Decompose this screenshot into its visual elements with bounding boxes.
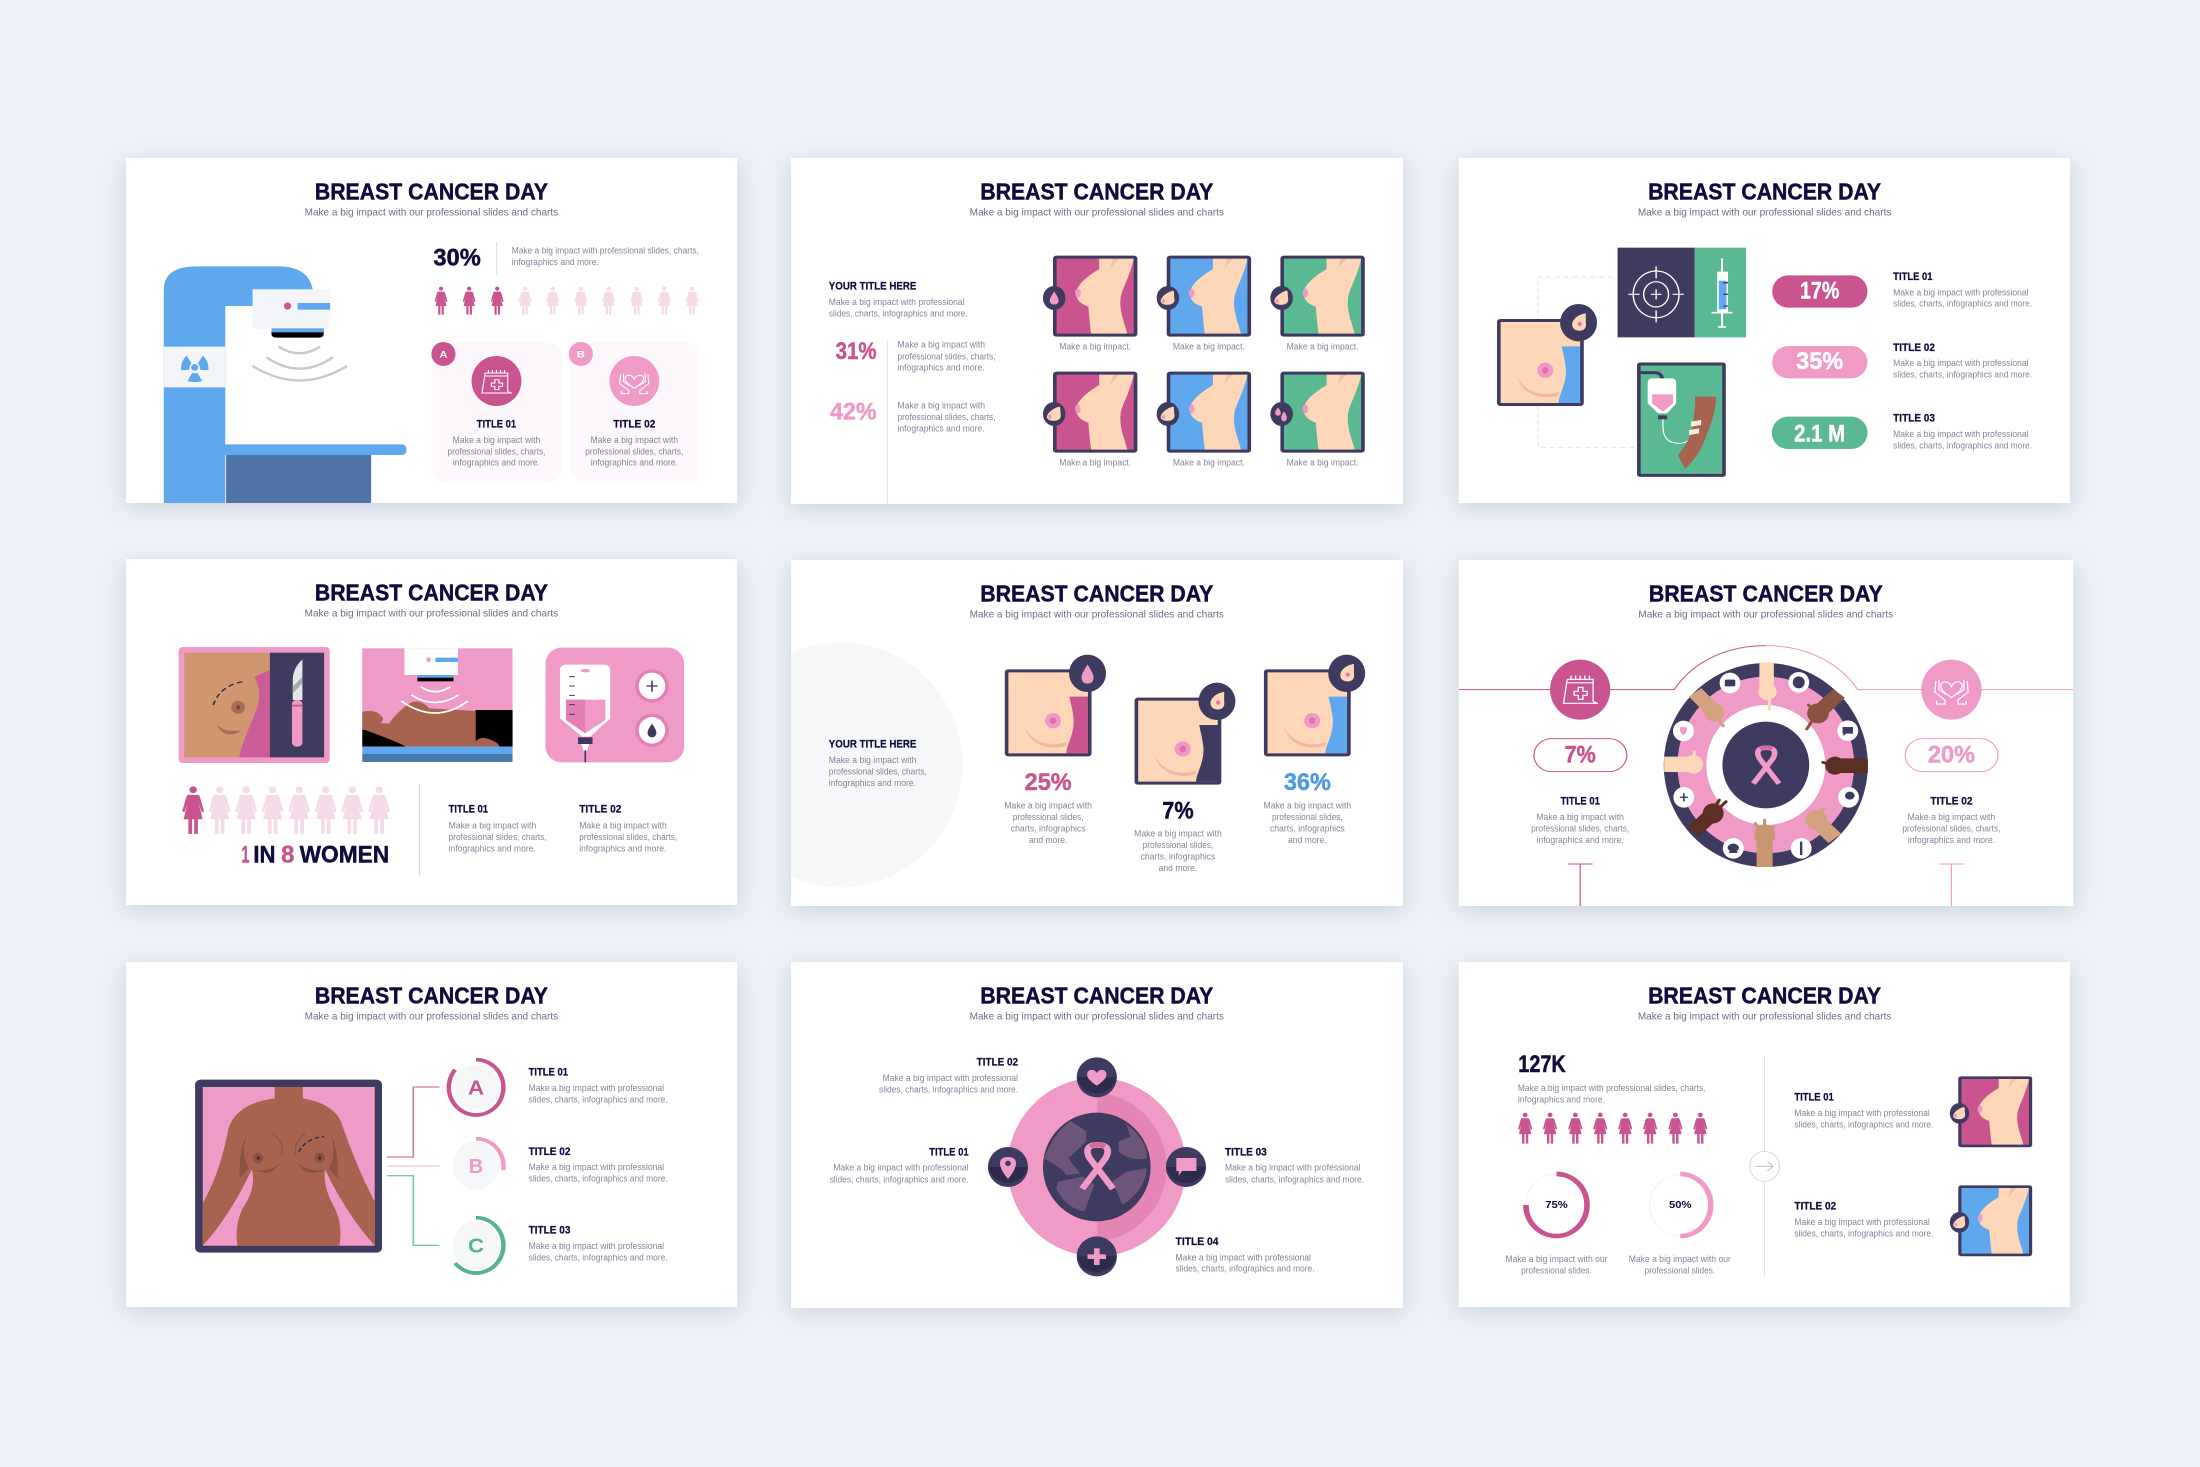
item: title 02 <box>1794 1186 2031 1255</box>
panel: slide 6 hands wheel <box>1459 560 2073 906</box>
card A: A <box>439 350 448 360</box>
slide 6 heading: BREAST CANCER DAY <box>1649 581 1883 607</box>
ring badge B: B <box>469 1154 483 1178</box>
right stat column: infographics and more. <box>1908 836 1995 846</box>
statistic: 1 in 8 women <box>241 841 389 868</box>
card A: infographics and more. <box>453 458 540 468</box>
donut: 50%: 50% <box>1669 1200 1692 1211</box>
text block: title 02: Make a big impact with <box>579 821 667 831</box>
illustration: IV bag and buttons <box>545 648 684 762</box>
text block: title 04: slides, charts, infographics and more. <box>1176 1264 1315 1274</box>
stat pills <box>1772 275 1867 449</box>
slide 7 heading <box>305 983 559 1022</box>
text block: title 01: infographics and more. <box>449 844 536 854</box>
left stat column: TITLE 01 <box>1560 795 1600 807</box>
text block: title 02: infographics and more. <box>579 844 666 854</box>
right stat column: professional slides, charts, <box>1902 824 2000 834</box>
text block: title 01: TITLE 01 <box>449 803 488 815</box>
card B <box>569 342 699 483</box>
right stat column: TITLE 02 <box>1930 795 1973 807</box>
stat column: 36%: 36% <box>1284 768 1331 795</box>
stat column: 25%: charts, infographics <box>1011 824 1086 834</box>
globe diagram <box>1008 1078 1186 1256</box>
text block: title 02: slides, charts, infographics and more. <box>879 1085 1018 1095</box>
card B: B <box>577 350 585 360</box>
text block: title 03: TITLE 03 <box>1225 1145 1267 1158</box>
stats column: infographics and more. <box>898 363 985 373</box>
your title block: YOUR TITLE HERE <box>829 738 916 750</box>
stat column: 7% <box>1134 683 1235 874</box>
slide 9 heading: Make a big impact with our professional slides and charts <box>1638 1012 1892 1022</box>
connector line <box>1459 646 2073 690</box>
donut: 75%: professional slides. <box>1521 1266 1592 1276</box>
text block: title 02 <box>579 803 677 854</box>
titled text list <box>529 1066 668 1263</box>
titled text list: TITLE 03 <box>1893 412 1935 424</box>
ring badge C <box>453 1218 503 1273</box>
slide 2 heading: Make a big impact with our professional slides and charts <box>970 208 1224 218</box>
ring badge B <box>453 1139 504 1189</box>
illustration: IV drip and arm <box>1639 364 1724 475</box>
titled text list <box>1893 270 2032 451</box>
stat column: 36%: and more. <box>1288 836 1327 846</box>
slide 8 heading <box>970 983 1224 1022</box>
donut: 75%: Make a big impact with our <box>1505 1255 1608 1265</box>
stat column: 25%: professional slides, <box>1013 813 1084 823</box>
panel: slide 4 one in eight women <box>126 559 737 905</box>
titled text list: slides, charts, infographics and more. <box>529 1253 668 1263</box>
slide 1 heading <box>305 179 559 218</box>
right stat column: 20% <box>1928 741 1975 768</box>
item: title 01 <box>1794 1078 2031 1146</box>
stat: 30%: Make a big impact with professional slides, charts, <box>512 246 699 256</box>
item: title 01: TITLE 01 <box>1794 1090 1834 1103</box>
your title block <box>829 279 968 319</box>
item: title 02: Make a big impact with professional <box>1794 1218 1930 1228</box>
your title block <box>829 738 927 789</box>
slide 2 heading <box>970 179 1224 218</box>
card B: TITLE 02 <box>613 417 656 430</box>
your title block: infographics and more. <box>829 779 916 789</box>
stats column: Make a big impact with <box>898 340 985 350</box>
text block: title 02: TITLE 02 <box>579 803 622 815</box>
hands wheel <box>1664 662 1868 867</box>
pictogram row: 1 of 8 women <box>182 786 390 834</box>
stat column: 36%: charts, infographics <box>1270 824 1345 834</box>
illustration: target and syringe <box>1618 248 1746 337</box>
slide 5 heading: Make a big impact with our professional slides and charts <box>970 610 1224 620</box>
stat: 127K: infographics and more. <box>1518 1095 1605 1105</box>
titled text list: slides, charts, infographics and more. <box>529 1095 668 1105</box>
ring badge A <box>449 1060 503 1115</box>
stat column: 25% <box>1004 655 1106 846</box>
left stat column: professional slides, charts, <box>1531 824 1629 834</box>
slide 3 heading: BREAST CANCER DAY <box>1648 179 1881 205</box>
slide 4 heading: BREAST CANCER DAY <box>315 580 548 606</box>
stat: 127K <box>1518 1050 1706 1105</box>
illustration: torso frame <box>195 1080 382 1253</box>
text block: title 03: Make a big impact with professional <box>1225 1163 1360 1173</box>
text block: title 02: professional slides, charts, <box>579 833 677 843</box>
card A: professional slides, charts, <box>447 447 545 457</box>
slide 6 heading <box>1638 581 1894 620</box>
left stat column <box>1531 660 1629 906</box>
ring badge C: C <box>468 1233 484 1257</box>
stat: 127K: 127K <box>1518 1050 1566 1077</box>
item: title 01: slides, charts, infographics and more. <box>1794 1120 1933 1130</box>
ring badge A: A <box>468 1075 484 1099</box>
slide 5 heading: BREAST CANCER DAY <box>980 581 1213 607</box>
stats column: 31% <box>836 337 877 364</box>
right stat column <box>1902 660 2000 906</box>
connectors <box>387 1087 439 1245</box>
titled text list: Make a big impact with professional <box>529 1163 664 1173</box>
left stat column: Make a big impact with <box>1536 813 1624 823</box>
donut: 75% <box>1505 1174 1608 1276</box>
stat column: 7%: professional slides, <box>1143 841 1213 851</box>
tile row 2: Make a big impact. <box>1059 458 1131 468</box>
slide 4 heading: Make a big impact with our professional slides and charts <box>305 609 559 619</box>
left stat column: 7% <box>1565 741 1596 768</box>
titled text list: Make a big impact with professional <box>1893 288 2029 298</box>
illustration: radiation therapy <box>362 648 513 762</box>
stat column: 7%: 7% <box>1162 797 1194 824</box>
titled text list: Make a big impact with professional <box>1893 359 2029 369</box>
text block: title 01: Make a big impact with <box>449 821 536 831</box>
tile row 1: Make a big impact. <box>1173 342 1245 352</box>
panel: slide 8 globe with four nodes <box>791 962 1403 1308</box>
stats column: professional slides, charts, <box>898 413 996 423</box>
titled text list: TITLE 03 <box>529 1224 571 1236</box>
slide 7 heading: BREAST CANCER DAY <box>315 983 548 1009</box>
slide 6 heading: Make a big impact with our professional slides and charts <box>1638 610 1894 620</box>
titled text list: slides, charts, infographics and more. <box>529 1174 668 1184</box>
titled text list: slides, charts, infographics and more. <box>1893 441 2032 451</box>
text block: title 01 <box>449 803 547 854</box>
text block: title 01: TITLE 01 <box>929 1145 969 1158</box>
stats column: professional slides, charts, <box>898 352 996 362</box>
text block: title 02 <box>879 1056 1018 1095</box>
titled text list: Make a big impact with professional <box>529 1084 664 1094</box>
text block: title 02: Make a big impact with professional <box>883 1074 1018 1084</box>
titled text list: TITLE 01 <box>529 1066 568 1078</box>
slide 8 heading: Make a big impact with our professional slides and charts <box>970 1012 1224 1022</box>
text block: title 01: professional slides, charts, <box>449 833 547 843</box>
tile row 2 <box>1043 373 1363 468</box>
illustration: mammography machine <box>164 266 406 503</box>
titled text list: TITLE 02 <box>529 1145 571 1158</box>
text block: title 01: slides, charts, infographics and more. <box>830 1175 969 1185</box>
stats column: 42% <box>830 398 877 425</box>
text block: title 04 <box>1176 1235 1315 1274</box>
slide 2 heading: BREAST CANCER DAY <box>980 179 1213 205</box>
stat column: 36% <box>1264 655 1365 846</box>
your title block: slides, charts, infographics and more. <box>829 309 968 319</box>
panel: slide 1 mammography machine <box>126 158 737 503</box>
tile row 2: Make a big impact. <box>1287 458 1359 468</box>
donut: 50%: Make a big impact with our <box>1629 1255 1731 1265</box>
card B: infographics and more. <box>591 458 678 468</box>
slide 8 heading: BREAST CANCER DAY <box>980 983 1213 1009</box>
slide 1 heading: BREAST CANCER DAY <box>315 179 548 205</box>
slide 1 heading: Make a big impact with our professional slides and charts <box>305 208 559 218</box>
card B: Make a big impact with <box>590 436 678 446</box>
donut: 50%: professional slides. <box>1644 1266 1715 1276</box>
item: title 02: TITLE 02 <box>1794 1199 1836 1212</box>
stat pills: 35% <box>1796 347 1843 374</box>
your title block: Make a big impact with <box>829 756 917 766</box>
titled text list: slides, charts, infographics and more. <box>1893 299 2032 309</box>
tile row 1: Make a big impact. <box>1287 342 1359 352</box>
slide 9 heading <box>1638 983 1892 1022</box>
slide 3 heading: Make a big impact with our professional slides and charts <box>1638 208 1892 218</box>
panel: slide 3 treatment stats <box>1459 158 2070 503</box>
arrow button <box>1750 1151 1779 1181</box>
stats column: infographics and more. <box>898 424 985 434</box>
node: speech bubble <box>1166 1147 1206 1187</box>
illustration: surgery scalpel <box>179 647 330 763</box>
stat column: 25%: 25% <box>1025 768 1072 795</box>
titled text list: slides, charts, infographics and more. <box>1893 370 2032 380</box>
panel: slide 2 six breast symptom tiles <box>791 158 1403 504</box>
tile row 1 <box>1043 257 1363 352</box>
stat column: 36%: professional slides, <box>1272 813 1343 823</box>
stat pills: 2.1 M <box>1794 420 1845 447</box>
node: plus <box>1077 1236 1117 1276</box>
text block: title 01: Make a big impact with professional <box>833 1163 969 1173</box>
stat column: 7%: and more. <box>1159 864 1197 874</box>
text block: title 01 <box>830 1145 969 1185</box>
text block: title 03 <box>1225 1145 1364 1185</box>
statistic: 1 in 8 women: 8 <box>281 841 294 868</box>
panel: slide 5 three percent frames <box>718 560 1403 906</box>
panel: slide 7 body with A B C list <box>126 962 737 1307</box>
node: pin <box>988 1147 1028 1187</box>
node: heart <box>1077 1057 1117 1097</box>
card A: Make a big impact with <box>453 436 540 446</box>
stat: 30%: infographics and more. <box>512 258 599 268</box>
your title block: YOUR TITLE HERE <box>829 279 916 292</box>
slide 3 heading <box>1638 179 1892 218</box>
statistic: 1 in 8 women: IN <box>253 841 275 868</box>
titled text list: Make a big impact with professional <box>1893 430 2029 440</box>
titled text list: Make a big impact with professional <box>529 1242 664 1252</box>
slide 4 heading <box>305 580 559 619</box>
slide 5 heading <box>970 581 1224 620</box>
stats column: Make a big impact with <box>898 401 985 411</box>
card B: professional slides, charts, <box>585 447 683 457</box>
text block: title 04: TITLE 04 <box>1176 1235 1219 1248</box>
stat column: 25%: and more. <box>1029 836 1067 846</box>
stat: 30%: 30% <box>433 244 481 271</box>
left stat column: infographics and more. <box>1537 836 1624 846</box>
statistic: 1 in 8 women: WOMEN <box>300 841 389 868</box>
stat column: 7%: Make a big impact with <box>1134 829 1222 839</box>
statistic: 1 in 8 women: 1 <box>241 841 249 868</box>
pictogram row: 8 women <box>1518 1113 1707 1144</box>
stat column: 25%: Make a big impact with <box>1004 801 1092 811</box>
your title block: Make a big impact with professional <box>829 298 965 308</box>
stats column <box>830 337 996 504</box>
stat column: 36%: Make a big impact with <box>1264 801 1351 811</box>
item: title 01: Make a big impact with professional <box>1794 1109 1930 1119</box>
text block: title 04: Make a big impact with professional <box>1176 1253 1311 1263</box>
slide 9 heading: BREAST CANCER DAY <box>1648 983 1881 1009</box>
right stat column: Make a big impact with <box>1908 813 1995 823</box>
donut: 75%: 75% <box>1545 1200 1568 1211</box>
donut: 50% <box>1629 1174 1731 1276</box>
titled text list: TITLE 01 <box>1893 270 1933 283</box>
text block: title 03: slides, charts, infographics and more. <box>1225 1175 1364 1185</box>
your title block: professional slides, charts, <box>829 767 927 777</box>
card A <box>431 342 561 483</box>
tile row 2: Make a big impact. <box>1173 458 1245 468</box>
stat: 30% <box>433 242 699 275</box>
card A: TITLE 01 <box>477 417 516 430</box>
titled text list: TITLE 02 <box>1893 341 1935 354</box>
slide 7 heading: Make a big impact with our professional slides and charts <box>305 1012 559 1022</box>
item: title 02: slides, charts, infographics and more. <box>1794 1229 1933 1239</box>
text block: title 02: TITLE 02 <box>977 1056 1018 1068</box>
panel: slide 9 127K with donuts <box>1459 962 2070 1307</box>
pictogram row: 3 of 10 women <box>435 287 699 315</box>
tile row 1: Make a big impact. <box>1059 342 1131 352</box>
stat column: 7%: charts, infographics <box>1141 852 1215 862</box>
stat pills: 17% <box>1800 277 1839 304</box>
stat: 127K: Make a big impact with professional slides, charts, <box>1518 1084 1706 1094</box>
illustration: breast frame <box>1499 304 1597 405</box>
